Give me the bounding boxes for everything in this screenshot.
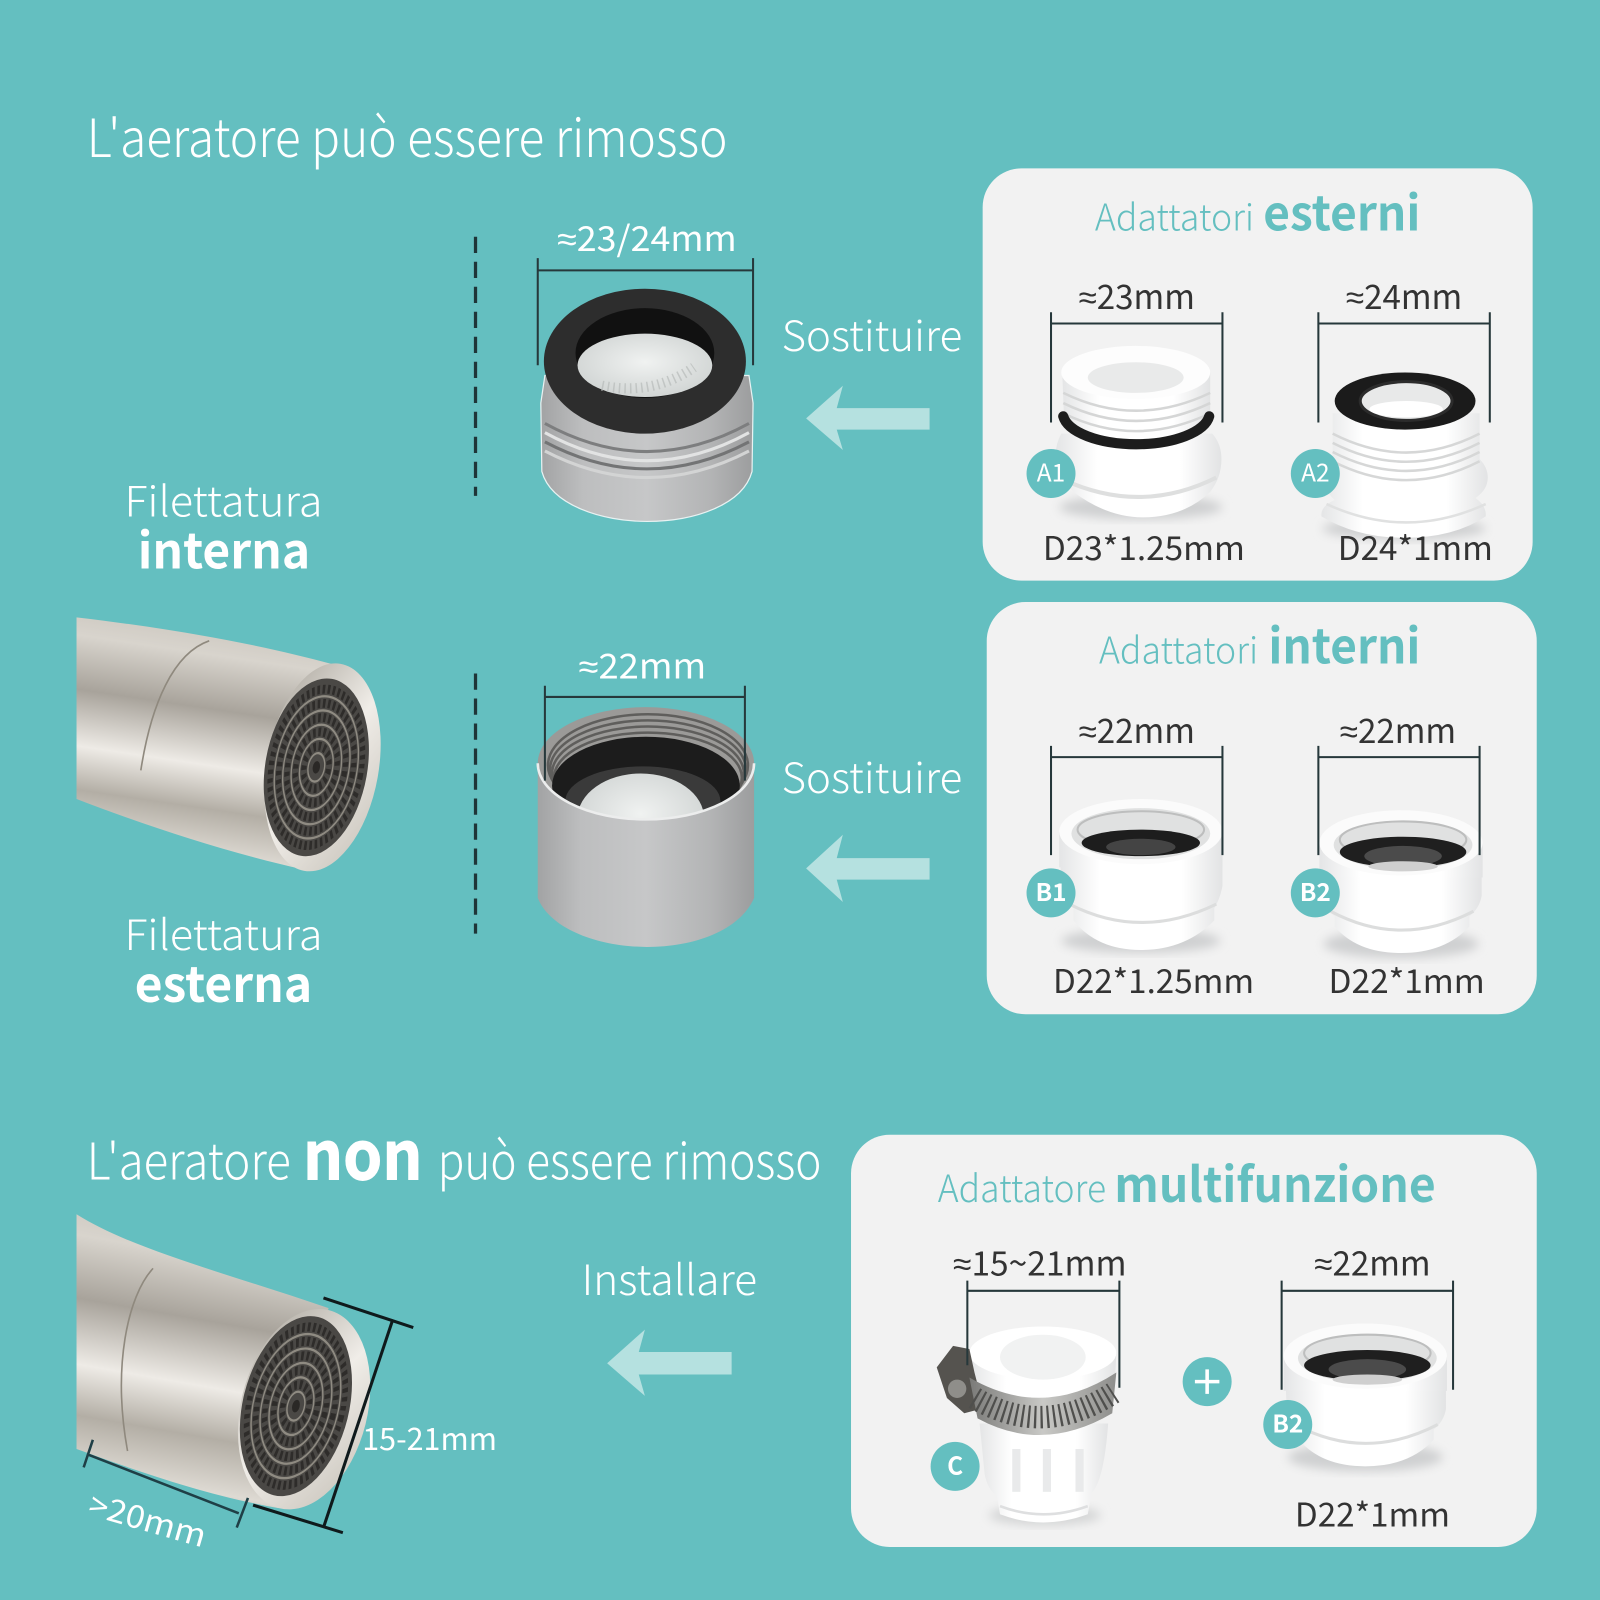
panel title: esterni: [1263, 175, 1420, 245]
arrow: lower: [806, 835, 930, 902]
heading: aerator not removable: può essere rimosso: [438, 1121, 821, 1195]
adapter B2: [1318, 746, 1483, 958]
aerator with external thread: ≈23/24mm: [557, 211, 737, 261]
badge C: C: [947, 1447, 963, 1482]
label: external thread: esterna: [135, 946, 312, 1017]
badge B2: [1291, 868, 1340, 917]
aerator with internal thread: ≈22mm: [579, 639, 706, 689]
badge A1: A1: [1037, 455, 1065, 490]
badge B2 in panel: B2: [1272, 1406, 1303, 1441]
badge A2: A2: [1301, 455, 1330, 490]
badge C: [931, 1442, 980, 1491]
panel title: Adattatori: [1099, 620, 1258, 674]
label: internal thread: [124, 468, 322, 583]
label: install: Installare: [582, 1247, 757, 1308]
dimension: diameter: [253, 1298, 413, 1533]
badge A1: [1027, 449, 1076, 498]
panel title: [938, 1146, 1436, 1216]
faucet with removable aerator: [77, 617, 396, 881]
badge B2: B2: [1300, 874, 1331, 909]
heading: aerator removable: L'aeratore può essere rimosso: [87, 96, 728, 173]
dimension C: ≈15~21mm: [953, 1237, 1127, 1286]
adapter A1: [1051, 312, 1222, 519]
adapter B1: [1051, 746, 1222, 953]
label: internal thread: Filettatura: [124, 468, 322, 529]
arrow: install: [607, 1330, 732, 1396]
panel title: Adattatori: [1095, 188, 1254, 242]
panel title: Adattatore: [938, 1158, 1106, 1213]
dimension: length: [84, 1440, 248, 1528]
dimension A1: ≈23mm: [1079, 270, 1195, 319]
panel title: interni: [1268, 607, 1420, 677]
plus icon: [1183, 1357, 1232, 1406]
dashed divider lower: [474, 673, 477, 934]
aerator with internal thread: [538, 639, 754, 947]
dimension A2: ≈24mm: [1346, 270, 1462, 319]
spec A1: D23*1.25mm: [1043, 523, 1245, 570]
panel: external adapters: [983, 168, 1533, 581]
adapter A2: [1318, 312, 1490, 540]
spec B1: D22*1.25mm: [1053, 956, 1254, 1003]
spec B2: D22*1mm: [1329, 956, 1485, 1003]
dimension B2 in panel: ≈22mm: [1314, 1237, 1431, 1286]
spec B2 in panel: D22*1mm: [1295, 1490, 1450, 1537]
badge B2 in panel: [1263, 1400, 1312, 1449]
label: replace (lower): Sostituire: [782, 745, 962, 806]
panel title: multifunzione: [1114, 1146, 1436, 1216]
adapter C clamp: [937, 1281, 1119, 1526]
panel: multifunction adapter: [851, 1135, 1537, 1547]
heading: aerator not removable: L'aeratore: [87, 1121, 291, 1195]
spec A2: D24*1mm: [1338, 523, 1493, 570]
label: internal thread: interna: [138, 512, 310, 583]
label: external thread: [124, 902, 322, 1017]
aerator with external thread: [538, 211, 753, 521]
dimension B1: ≈22mm: [1079, 704, 1195, 753]
panel title: [1099, 607, 1420, 677]
faucet with fixed aerator: [77, 1214, 413, 1533]
panel: internal adapters: [987, 602, 1537, 1014]
adapter B2 in panel: [1282, 1281, 1453, 1471]
heading: aerator not removable: non: [303, 1103, 422, 1200]
arrow: upper: [806, 386, 930, 450]
label: external thread: Filettatura: [124, 902, 322, 963]
label: replace (upper): Sostituire: [782, 303, 962, 364]
dimension B2: ≈22mm: [1340, 704, 1456, 753]
badge B1: [1027, 868, 1076, 917]
panel title: [1095, 175, 1420, 245]
label: diameter 15-21mm: 15-21mm: [362, 1414, 497, 1459]
badge B1: B1: [1035, 874, 1067, 909]
heading: aerator not removable: [87, 1103, 821, 1200]
label: length over 20mm: >20mm: [84, 1480, 212, 1557]
badge A2: [1291, 449, 1340, 498]
dashed divider upper: [474, 237, 477, 496]
